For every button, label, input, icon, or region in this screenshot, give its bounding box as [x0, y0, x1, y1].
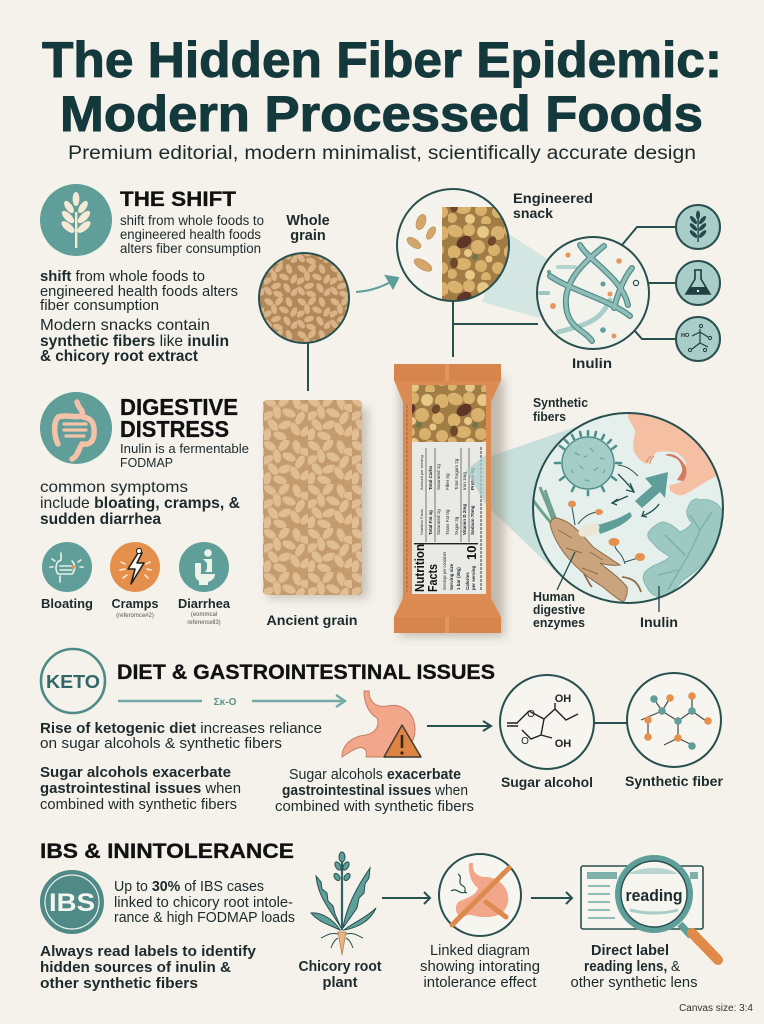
text: sugar alcohols centre: Sugar alcohols exacerbate	[289, 767, 461, 783]
text: symptoms	[40, 479, 240, 528]
label: human digestive enzymes	[533, 552, 585, 630]
label: synthetic fiber: Synthetic fiber	[625, 773, 724, 789]
nutrition label: Total Sugars 2g	[454, 458, 459, 490]
nutrition label: Fiber 5g	[445, 473, 450, 490]
illustration: root	[533, 487, 641, 602]
label: ancient grain: Ancient grain	[266, 612, 358, 628]
text: sugar alcohols left	[40, 765, 241, 813]
nutrition label: 1 bar (30g)	[456, 567, 461, 590]
label: cramps: Cramps	[112, 597, 159, 611]
label: synthetic fibers: Synthetic	[533, 396, 588, 410]
text: modern snacks: synthetic fibers like inulin	[40, 333, 229, 350]
title: The Hidden Fiber Epidemic:	[42, 32, 722, 88]
nutrition label: Saturated 1g	[436, 509, 441, 535]
connector: molecules	[594, 722, 628, 724]
text: symptoms: include bloating, cramps, &	[40, 495, 240, 512]
label: human digestive enzymes: digestive	[533, 603, 585, 617]
icon: chicory plant	[311, 852, 376, 955]
icon: stomach warning	[342, 691, 421, 757]
illustration: virus	[555, 431, 621, 495]
label: chicory root plant: Chicory root	[298, 959, 382, 975]
heading: ibs: IBS & ININTOLERANCE	[40, 840, 294, 863]
nutrition label: Saturated 1g	[436, 464, 441, 490]
diagram: digestion close-up	[533, 400, 730, 603]
text: shift paragraph: shift from whole foods to	[40, 268, 205, 285]
label: diarrhea: (eommcal	[191, 612, 217, 618]
nutrition label: per serving	[471, 565, 476, 590]
text: ibs stat	[114, 879, 295, 926]
label: whole grain: grain	[290, 228, 326, 244]
text: read labels	[40, 943, 257, 992]
panel: ibs and intolerance	[40, 840, 718, 992]
image: ancient grain bar	[263, 400, 368, 598]
label: inulin bottom: Inulin	[640, 614, 678, 630]
nutrition label: Calories	[465, 572, 470, 590]
nutrition label: Nutrition	[412, 544, 427, 592]
arrow: large teal	[635, 472, 668, 508]
nutrition label: Protein 6g	[470, 468, 475, 490]
text: rise of ketogenic diet	[40, 721, 322, 752]
wrapper window	[412, 385, 486, 442]
text: shift intro	[120, 213, 264, 256]
image: snack close-up circle	[397, 189, 512, 302]
label: chicory root plant	[298, 959, 382, 991]
label: inulin top: Inulin	[572, 355, 612, 371]
heading: the shift: THE SHIFT	[120, 188, 236, 211]
diagram: inulin fibers circle	[537, 237, 649, 349]
label: whole grain	[286, 213, 330, 244]
label: linked diagram: Linked diagram	[430, 943, 530, 959]
label: engineered snack	[513, 191, 593, 221]
text: read labels: hidden sources of inulin &	[40, 959, 231, 976]
diagram: synthetic fiber molecule	[627, 673, 721, 767]
text: fodmap: FODMAP	[120, 455, 173, 470]
text: sugar alcohols left: combined with synthetic fibers	[40, 797, 237, 813]
diagram: sugar alcohol molecule: O	[527, 709, 535, 720]
label: synthetic fibers: fibers	[533, 410, 566, 424]
translucent beam over label	[466, 455, 486, 505]
label: direct label reading	[570, 943, 698, 991]
icon: document and magnifier	[581, 858, 718, 960]
text: sugar alcohols left: gastrointestinal issues when	[40, 781, 241, 797]
label: diarrhea	[178, 597, 231, 626]
heading: diet and gi issues: DIET & GASTROINTESTINAL ISSUES	[117, 661, 495, 684]
magnifier beam: snack to inulin	[482, 232, 552, 318]
icon: flask	[676, 261, 720, 305]
label: linked diagram: showing intorating	[420, 959, 540, 975]
nutrition label: Vitamin D 2mg	[462, 504, 467, 535]
text: sugar alcohols centre: gastrointestinal issues when	[282, 783, 468, 799]
connectors: inulin to icons	[622, 227, 676, 339]
label: sugar alcohol: Sugar alcohol	[501, 774, 593, 790]
image: whole grain circle	[259, 253, 349, 343]
arrow: grain to snack	[356, 276, 398, 292]
panel: keto diet	[40, 649, 724, 815]
text: shift paragraph: engineered health foods alters	[40, 283, 238, 300]
label: direct label reading: reading lens, &	[584, 959, 680, 975]
arrow: keto progression	[118, 695, 345, 708]
text: ibs stat: Up to 30% of IBS cases	[114, 879, 264, 895]
text: sugar alcohols centre	[275, 767, 474, 815]
icon: keto badge: KETO	[46, 672, 100, 692]
arrows: small flow	[612, 465, 659, 517]
diagram: sugar alcohol molecule: OH	[555, 693, 571, 705]
nutrition label: Facts	[425, 564, 440, 592]
text: sugar alcohols centre: combined with synthetic fibers	[275, 799, 474, 815]
nutrition label: Serving size	[449, 563, 454, 590]
heading: digestive distress: DISTRESS	[120, 416, 229, 442]
label: linked diagram	[420, 943, 540, 991]
nutrition label	[412, 442, 486, 594]
icon: intestines	[40, 392, 112, 464]
nutrition label: Servings per container	[442, 552, 447, 590]
product: snack bar wrapper	[394, 364, 504, 636]
label: diarrhea: referencell3)	[187, 620, 221, 626]
diagram: sugar alcohol molecule: OH	[555, 738, 571, 750]
label: engineered snack: Engineered	[513, 191, 593, 206]
connectors: snack to wrapper	[453, 300, 538, 357]
text: symptoms: sudden diarrhea	[40, 511, 161, 528]
nutrition label: Iron 1mg	[462, 472, 467, 490]
illustration: nose	[628, 414, 716, 496]
label: diarrhea: Diarrhea	[178, 597, 231, 611]
icon: molecule: HO	[681, 333, 690, 339]
label: direct label reading: Direct label	[591, 943, 669, 959]
icon: wheat small	[676, 205, 720, 249]
diagram: sugar alcohol molecule	[500, 675, 594, 769]
diagram: sugar alcohol molecule: O	[521, 736, 529, 747]
illustration: leafy inulin	[643, 499, 723, 597]
nutrition label: Sodium 70mg	[470, 505, 475, 535]
icon: stomach crossed out	[439, 854, 521, 936]
text: ibs stat: rance & high FODMAP loads	[114, 910, 295, 926]
icon: bloating	[42, 542, 92, 592]
icon: ibs badge: IBS	[49, 889, 95, 917]
label: linked diagram: intolerance effect	[424, 975, 536, 991]
label: inulin bottom	[640, 586, 678, 630]
panel: the shift	[40, 184, 264, 365]
label: whole grain: Whole	[286, 213, 330, 229]
text: fodmap	[120, 441, 249, 470]
connector: grain to bar	[307, 343, 309, 391]
text: rise of ketogenic diet: on sugar alcohols & synthetic fibers	[40, 736, 282, 752]
heading: digestive distress	[120, 394, 238, 442]
arrow: keto progression: Σκ-O	[214, 697, 237, 708]
text: shift intro: shift from whole foods to	[120, 213, 264, 228]
subtitle: Premium editorial, modern minimalist, scientifically accurate design	[68, 143, 696, 164]
text: read labels: other synthetic fibers	[40, 975, 198, 992]
label: human digestive enzymes: Human	[533, 590, 575, 604]
icon: diarrhea	[179, 542, 229, 592]
title	[42, 32, 722, 142]
text: ibs stat: linked to chicory root intole-	[114, 895, 293, 911]
icon: keto badge	[41, 649, 105, 713]
arrow: plant to diagram	[382, 892, 430, 904]
arrow: stomach to sugar alcohol	[427, 721, 491, 731]
label: cramps	[112, 597, 159, 619]
nutrition label: Sugar 3g	[454, 516, 459, 535]
label: chicory root plant: plant	[322, 975, 358, 991]
icon: cramps	[110, 542, 160, 592]
footnote: canvas size: Canvas size: 3:4	[679, 1003, 753, 1014]
text: modern snacks: Modern snacks contain	[40, 317, 210, 334]
label: bloating: Bloating	[41, 597, 93, 611]
text: symptoms: common symptoms	[40, 479, 188, 496]
text: sugar alcohols left: Sugar alcohols exacerbate	[40, 765, 231, 781]
nutrition label: Total Fat 4g	[428, 510, 433, 535]
panel: digestive distress	[40, 189, 753, 1014]
text: modern snacks	[40, 317, 229, 365]
nutrition label: 10	[464, 546, 479, 560]
arrow: diagram to lens	[531, 892, 572, 904]
icon: document and magnifier: reading	[626, 886, 682, 905]
text: read labels: Always read labels to identify	[40, 943, 257, 960]
heading: digestive distress: DIGESTIVE	[120, 394, 238, 420]
icon: wheat	[40, 184, 112, 256]
text: rise of ketogenic diet: Rise of ketogenic diet increases reliance	[40, 721, 322, 737]
icon: ibs badge	[41, 871, 103, 933]
label: human digestive enzymes: enzymes	[533, 616, 585, 630]
text: modern snacks: & chicory root extract	[40, 348, 199, 365]
text: fodmap: Inulin is a fermentable	[120, 441, 249, 456]
text: shift paragraph: fiber consumption	[40, 297, 159, 314]
icon: molecule	[676, 317, 720, 361]
label: direct label reading: other synthetic lens	[570, 975, 698, 991]
nutrition label: Nutrition Facts	[419, 509, 424, 535]
label: synthetic fibers	[533, 396, 588, 424]
nutrition label: Amount per serving	[419, 455, 424, 490]
nutrition label: Total Carbs	[428, 465, 433, 490]
label: cramps: (referomce#2)	[116, 613, 154, 619]
label: engineered snack: snack	[513, 206, 554, 221]
nutrition label: Trans Fat 0g	[445, 509, 450, 535]
text: shift paragraph	[40, 268, 238, 314]
text: shift intro: engineered health foods	[120, 227, 261, 242]
magnifier beam: label to digestion	[486, 426, 578, 572]
text: shift intro: alters fiber consumption	[120, 241, 261, 256]
illustration: enzymes	[568, 501, 645, 564]
title: Modern Processed Foods	[60, 86, 703, 142]
